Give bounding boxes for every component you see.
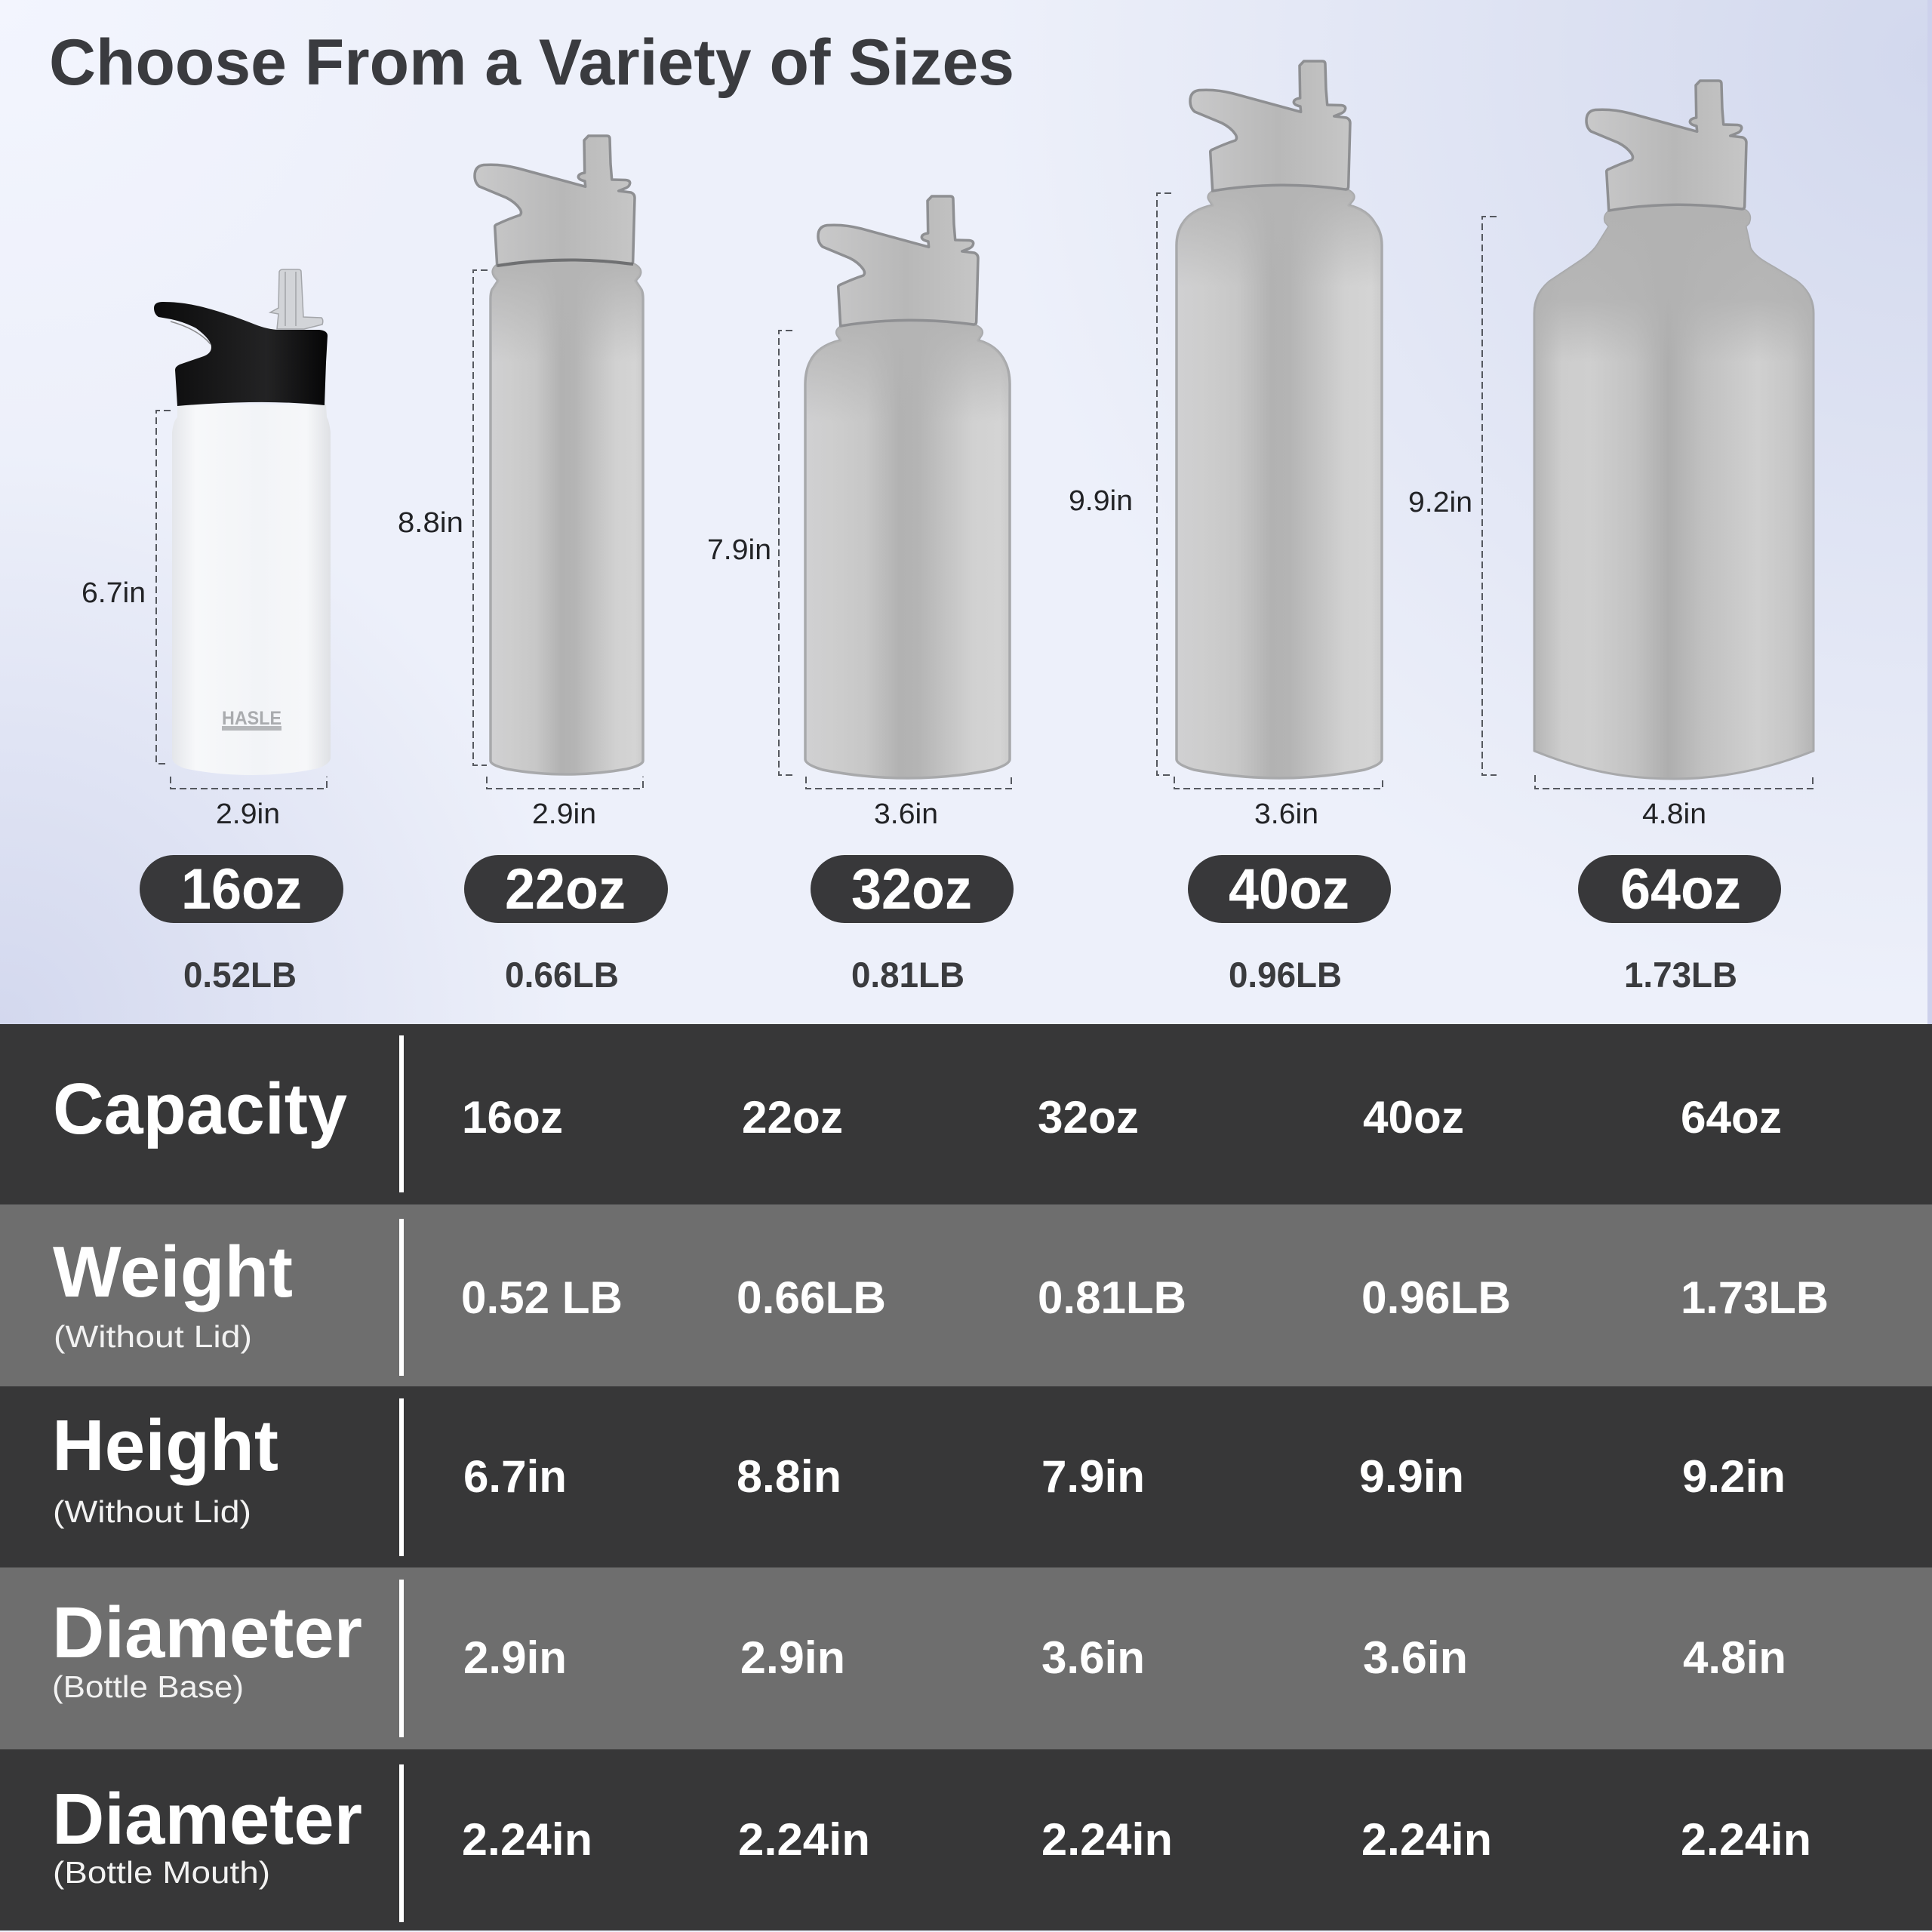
pill: 22oz: 22oz [505,857,626,921]
table row: diameter bottle mouth: 2.24in [1041,1814,1173,1865]
base width labels: 3.6in [874,798,938,830]
table row: height: (Without Lid) [53,1494,251,1529]
table row: height [0,1386,1932,1567]
table row: height: 9.2in [1682,1451,1786,1502]
pill: 16oz [140,855,343,923]
collar line [497,260,633,266]
table row: diameter bottle mouth [0,1749,1932,1930]
neck shading [492,260,641,362]
base width labels: 4.8in [1642,798,1706,830]
pill: 22oz [464,855,668,923]
lid [818,196,978,326]
height labels: 8.8in [398,507,463,539]
height labels: 7.9in [707,534,771,566]
table row: capacity: 64oz [1681,1092,1782,1143]
table row: height: 7.9in [1041,1451,1145,1502]
pill: 32oz: 32oz [851,857,972,921]
lid highlight [171,321,211,344]
table row: diameter bottle base: 4.8in [1683,1632,1786,1683]
table row: weight: 0.81LB [1038,1272,1186,1323]
table row: capacity: 32oz [1038,1092,1139,1143]
table row: height: 6.7in [463,1451,567,1502]
height labels: 9.9in [1069,485,1133,517]
pill: 64oz [1578,855,1781,923]
base width labels: 3.6in [1254,798,1318,830]
bottle body [172,405,331,775]
table row: diameter bottle base: 3.6in [1363,1632,1468,1683]
height labels [82,485,1472,609]
table row: weight [0,1204,1932,1386]
neck shading [1178,187,1380,287]
table row: height: 8.8in [737,1451,841,1502]
height labels: 6.7in [82,577,146,609]
table row: diameter bottle base: 2.9in [463,1632,567,1683]
neck shading [807,321,1008,423]
shoulder shading [1536,206,1812,362]
bottle body [1177,187,1382,778]
table row: weight: 0.52 LB [461,1272,623,1323]
table row: diameter bottle base: 2.9in [740,1632,845,1683]
table row: diameter bottle mouth: Diameter [52,1779,362,1860]
table row: diameter bottle mouth: 2.24in [738,1814,870,1865]
black lid [154,302,328,406]
lid [1190,61,1350,191]
weight labels: 0.52LB [183,955,297,995]
bottle: 64oz silhouette [1534,81,1814,779]
dimension brackets [156,193,1813,789]
table row: diameter bottle mouth: 2.24in [1681,1814,1811,1865]
pill: 40oz [1188,855,1391,923]
capacity pills [140,855,1781,923]
title: Choose From a Variety of Sizes [49,26,1014,99]
table row: capacity: 40oz [1363,1092,1464,1143]
table row: weight: 1.73LB [1681,1272,1829,1323]
bottle: 32oz silhouette [805,196,1010,778]
weight labels: 0.96LB [1229,955,1342,995]
bottle body [805,321,1010,778]
table row: weight: (Without Lid) [54,1319,252,1354]
table row: diameter bottle base: 3.6in [1041,1632,1145,1683]
table row: diameter bottle base: (Bottle Base) [52,1669,244,1704]
weight labels: 1.73LB [1624,955,1737,995]
table row: weight: 0.66LB [737,1272,886,1323]
table row: diameter bottle base [0,1567,1932,1749]
panel: gradient background [0,0,1932,1024]
base width labels [216,798,1706,830]
table row: weight: Weight [53,1232,293,1312]
table row: height: Height [52,1405,278,1486]
pill: 32oz [811,855,1014,923]
table row: diameter bottle mouth: 2.24in [1361,1814,1492,1865]
table row: capacity: Capacity [53,1069,347,1149]
table row: diameter bottle mouth: 2.24in [462,1814,592,1865]
logo: HASLE [222,708,281,729]
table row: weight: 0.96LB [1361,1272,1511,1323]
bottle: 22oz silhouette [475,136,643,774]
base width labels: 2.9in [216,798,280,830]
table row: diameter bottle base: Diameter [52,1592,362,1673]
bottle body [491,260,643,774]
table row: diameter bottle mouth: (Bottle Mouth) [53,1855,270,1890]
weight labels: 0.81LB [851,955,964,995]
bottle: 40oz silhouette [1177,61,1382,778]
pill: 40oz: 40oz [1229,857,1349,921]
table row: capacity: 22oz [742,1092,843,1143]
table row: capacity: 16oz [462,1092,563,1143]
table row: capacity [0,1024,1932,1204]
lid [1586,81,1746,211]
bottle body [1534,206,1814,779]
base width labels: 2.9in [532,798,596,830]
table row: height: 9.9in [1359,1451,1464,1502]
weight labels: 0.66LB [505,955,619,995]
weight labels [183,955,1737,995]
height labels: 9.2in [1408,487,1472,518]
lid [475,136,635,266]
pill: 16oz: 16oz [181,857,302,921]
straw [270,269,323,329]
bottle: 16oz white [154,269,331,775]
pill: 64oz: 64oz [1620,857,1741,921]
